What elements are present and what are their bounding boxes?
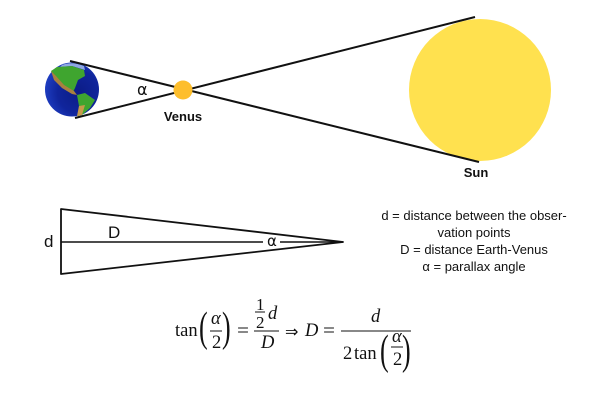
label: Sun: Sun (464, 165, 488, 180)
equation: = (237, 320, 249, 342)
equation: d (371, 307, 381, 327)
equation: D (260, 333, 275, 353)
legend text (381, 208, 567, 274)
equation: D (304, 321, 319, 341)
equation: 2 (393, 350, 402, 370)
equation: d (268, 304, 278, 324)
equation: ) (402, 327, 411, 374)
label: alpha: α (137, 80, 148, 99)
equation: 2 (212, 333, 221, 353)
equation: 2 (343, 344, 352, 364)
equation: = (323, 320, 335, 342)
sight lines (70, 17, 479, 162)
equation: tan (175, 321, 198, 341)
equation: ( (380, 327, 389, 374)
icon: Earth (45, 62, 99, 116)
triangle diagram (61, 209, 343, 274)
legend text: vation points (438, 225, 511, 240)
label: Venus: Venus (164, 109, 202, 124)
equation: tan (354, 344, 377, 364)
legend text: D = distance Earth-Venus (400, 242, 548, 257)
equation: ( (199, 304, 208, 351)
label: d: d (44, 232, 53, 251)
equation: α (211, 309, 222, 329)
equation: 1 (256, 295, 264, 314)
legend text: d = distance between the obser- (381, 208, 567, 223)
legend text: α = parallax angle (422, 259, 526, 274)
label: D: D (108, 223, 120, 242)
equation (175, 295, 411, 374)
icon: Venus (174, 80, 192, 100)
equation: α (392, 327, 403, 347)
icon: Sun (409, 19, 551, 161)
equation: ) (222, 304, 231, 351)
equation: ⇒ (285, 322, 298, 341)
label: triangle alpha: α (267, 232, 277, 250)
equation: 2 (256, 313, 264, 332)
